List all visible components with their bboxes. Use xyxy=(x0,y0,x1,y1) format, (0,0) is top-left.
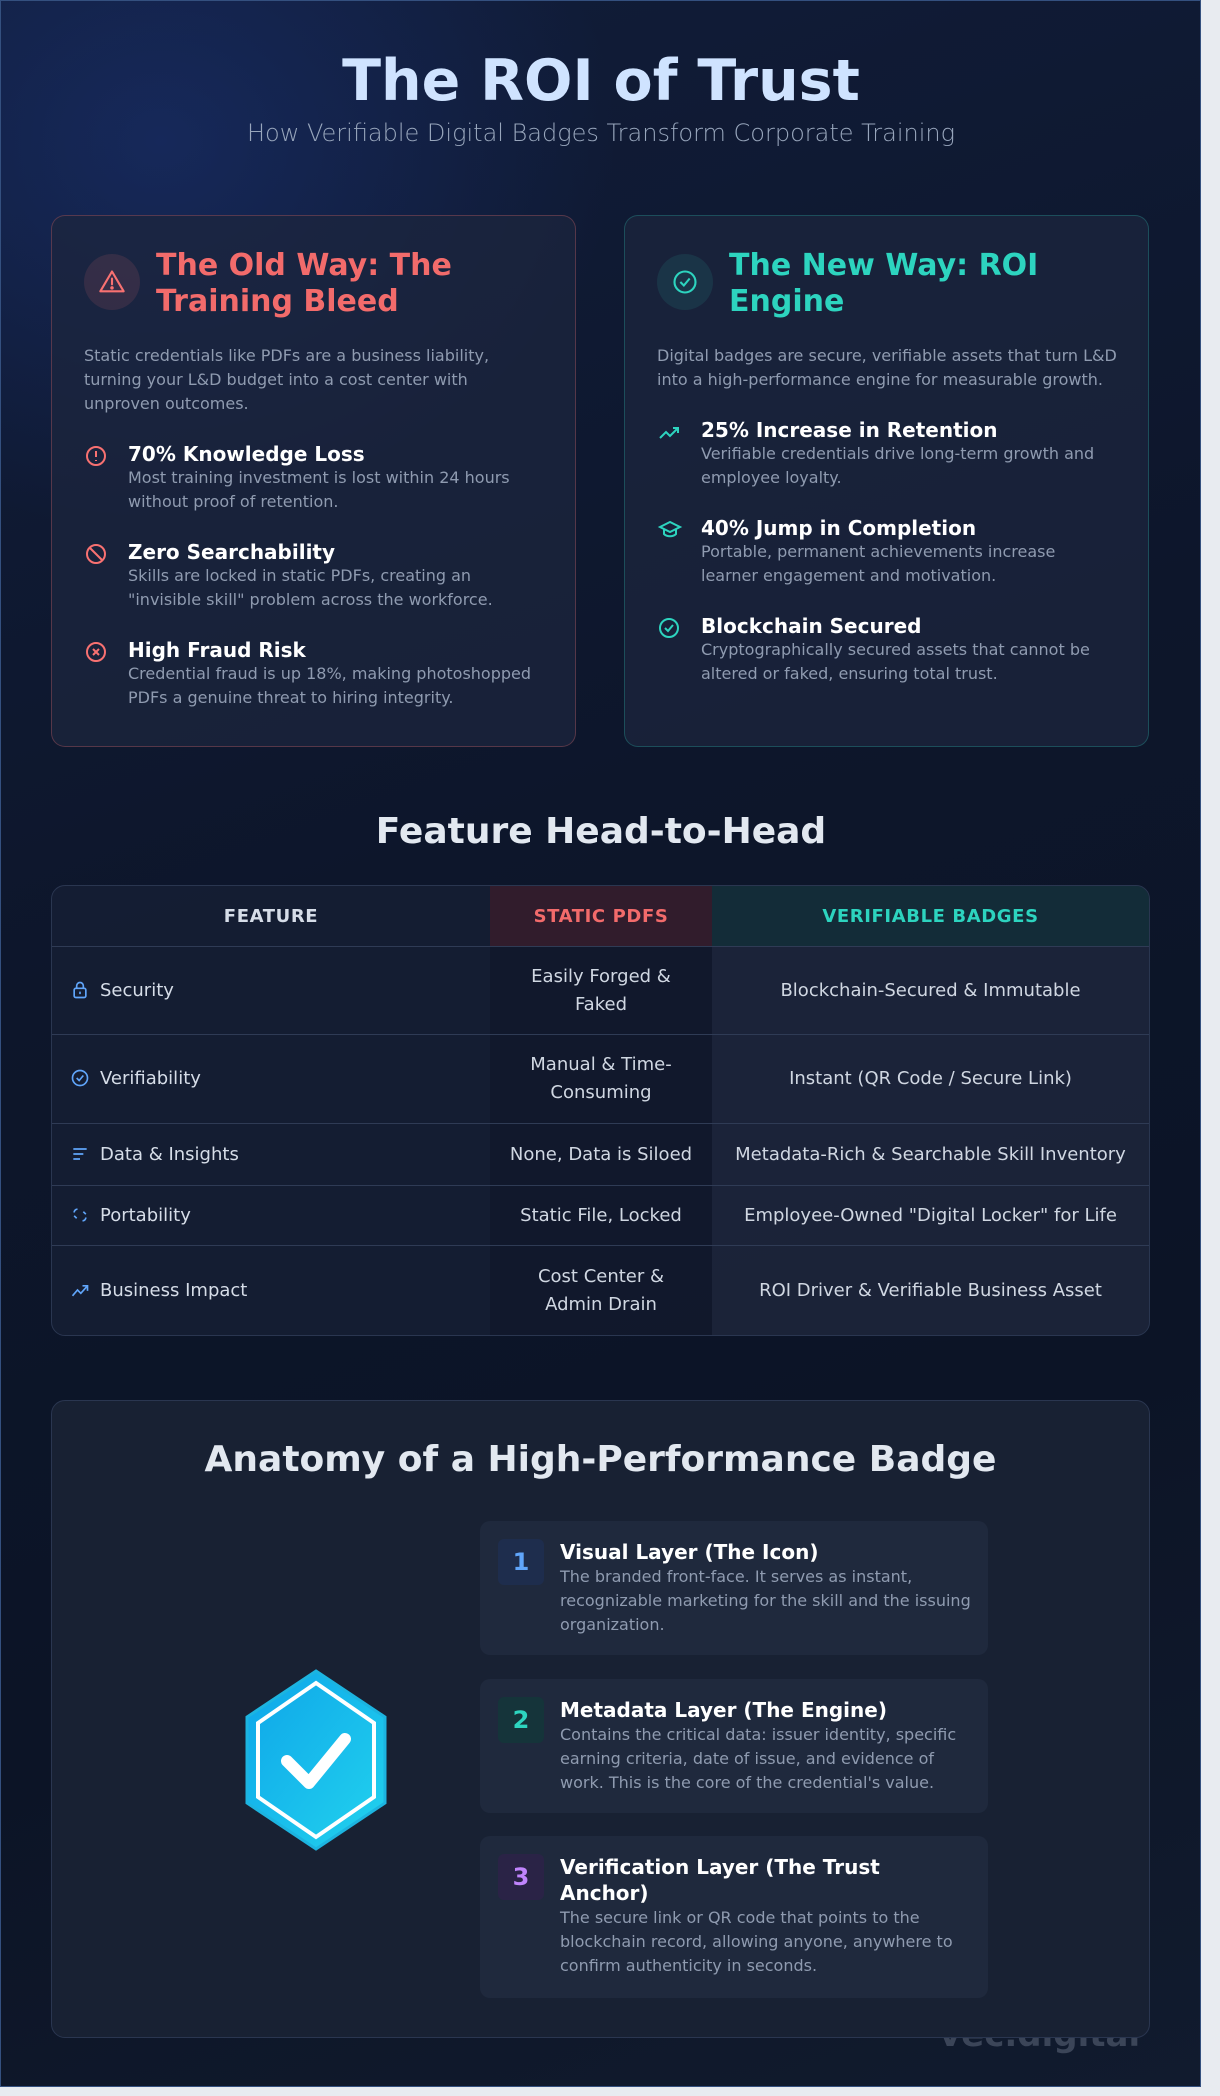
panel: new way xyxy=(624,215,1149,747)
item: knowledge loss: Most training investment is lost within 24 hours without proof of retention. xyxy=(128,468,510,511)
comparison table: Blockchain-Secured & Immutable xyxy=(780,980,1081,1000)
item: completion xyxy=(658,516,1055,585)
item: searchability: Zero Searchability xyxy=(128,540,335,564)
comparison table: VERIFIABLE BADGES xyxy=(822,906,1039,926)
comparison table: Consuming xyxy=(550,1082,652,1103)
comparison table: Easily Forged & xyxy=(531,966,671,986)
item: knowledge loss: 70% Knowledge Loss xyxy=(128,442,365,466)
layer 2 xyxy=(480,1679,988,1813)
layer 2: Metadata Layer (The Engine) xyxy=(560,1698,887,1722)
item: completion: Portable, permanent achievements increase learner engagement and motivation. xyxy=(701,542,1055,585)
item: searchability: Skills are locked in static PDFs, creating an "invisible skill" problem across the workforce. xyxy=(128,566,493,609)
heading: anatomy: Anatomy of a High-Performance Badge xyxy=(205,1439,996,1480)
layer 1 xyxy=(480,1521,988,1655)
comparison table: Cost Center & xyxy=(538,1266,664,1286)
layer 3 xyxy=(480,1836,988,1998)
title: The ROI of Trust xyxy=(342,48,860,114)
item: retention xyxy=(659,418,1094,487)
panel: anatomy xyxy=(51,1400,1150,2038)
layer 2: 2 xyxy=(513,1706,529,1734)
heading: feature head-to-head: Feature Head-to-Head xyxy=(376,811,826,852)
comparison table: Verifiability xyxy=(100,1068,201,1089)
description: Digital badges are secure, verifiable assets that turn L&D into a high-performance engine for measurable growth. xyxy=(657,346,1117,389)
comparison table: Static File, Locked xyxy=(520,1204,682,1226)
description: Static credentials like PDFs are a business liability, turning your L&D budget into a cost center with unproven outcomes. xyxy=(84,346,489,413)
item: retention: 25% Increase in Retention xyxy=(701,418,998,442)
heading: old way: The Old Way: The Training Bleed xyxy=(156,248,452,319)
comparison table: Faked xyxy=(575,994,627,1014)
comparison table: ROI Driver & Verifiable Business Asset xyxy=(759,1280,1102,1300)
item: blockchain: Blockchain Secured xyxy=(701,614,921,638)
comparison table: Business Impact xyxy=(100,1280,247,1300)
icon: badge hexagon xyxy=(246,1669,386,1851)
item: fraud: Credential fraud is up 18%, making photoshopped PDFs a genuine threat to hiring integrity. xyxy=(128,664,531,707)
item: blockchain: Cryptographically secured assets that cannot be altered or faked, ensuring total trust. xyxy=(701,640,1090,683)
panel: old way xyxy=(51,215,576,747)
comparison table: Manual & Time- xyxy=(530,1054,672,1075)
comparison table: None, Data is Siloed xyxy=(510,1144,692,1164)
item: completion: 40% Jump in Completion xyxy=(701,516,976,540)
comparison table: FEATURE xyxy=(224,906,318,926)
comparison table: Instant (QR Code / Secure Link) xyxy=(789,1068,1072,1089)
item: blockchain xyxy=(659,614,1090,683)
item: searchability xyxy=(86,540,493,609)
layer 3: Verification Layer (The Trust Anchor) xyxy=(560,1855,880,1905)
heading: new way: The New Way: ROI Engine xyxy=(729,248,1038,319)
layer 1: Visual Layer (The Icon) xyxy=(560,1540,818,1564)
layer 3: The secure link or QR code that points to the blockchain record, allowing anyone, anywhere to confirm authenticity in seconds. xyxy=(560,1908,953,1975)
comparison table: Employee-Owned "Digital Locker" for Life xyxy=(744,1204,1117,1226)
layer 2: Contains the critical data: issuer identity, specific earning criteria, date of issue, and evidence of work. This is the core of the credential's value. xyxy=(560,1725,956,1792)
comparison table: Portability xyxy=(100,1204,191,1226)
item: fraud: High Fraud Risk xyxy=(128,638,306,662)
subtitle: How Verifiable Digital Badges Transform Corporate Training xyxy=(247,119,955,147)
layer 1: 1 xyxy=(513,1548,529,1576)
layer 1: The branded front-face. It serves as instant, recognizable marketing for the skill and the issuing organization. xyxy=(560,1567,971,1634)
comparison table: Admin Drain xyxy=(545,1294,657,1314)
comparison table xyxy=(51,885,1150,1336)
item: retention: Verifiable credentials drive long-term growth and employee loyalty. xyxy=(701,444,1094,487)
layer 3: 3 xyxy=(513,1863,529,1891)
comparison table: STATIC PDFS xyxy=(534,906,668,926)
item: knowledge loss xyxy=(86,442,510,511)
comparison table: Metadata-Rich & Searchable Skill Inventory xyxy=(735,1144,1126,1164)
item: fraud xyxy=(86,638,531,707)
comparison table: Data & Insights xyxy=(100,1144,239,1164)
comparison table: Security xyxy=(100,980,174,1000)
watermark: vec.digital xyxy=(939,2015,1140,2055)
